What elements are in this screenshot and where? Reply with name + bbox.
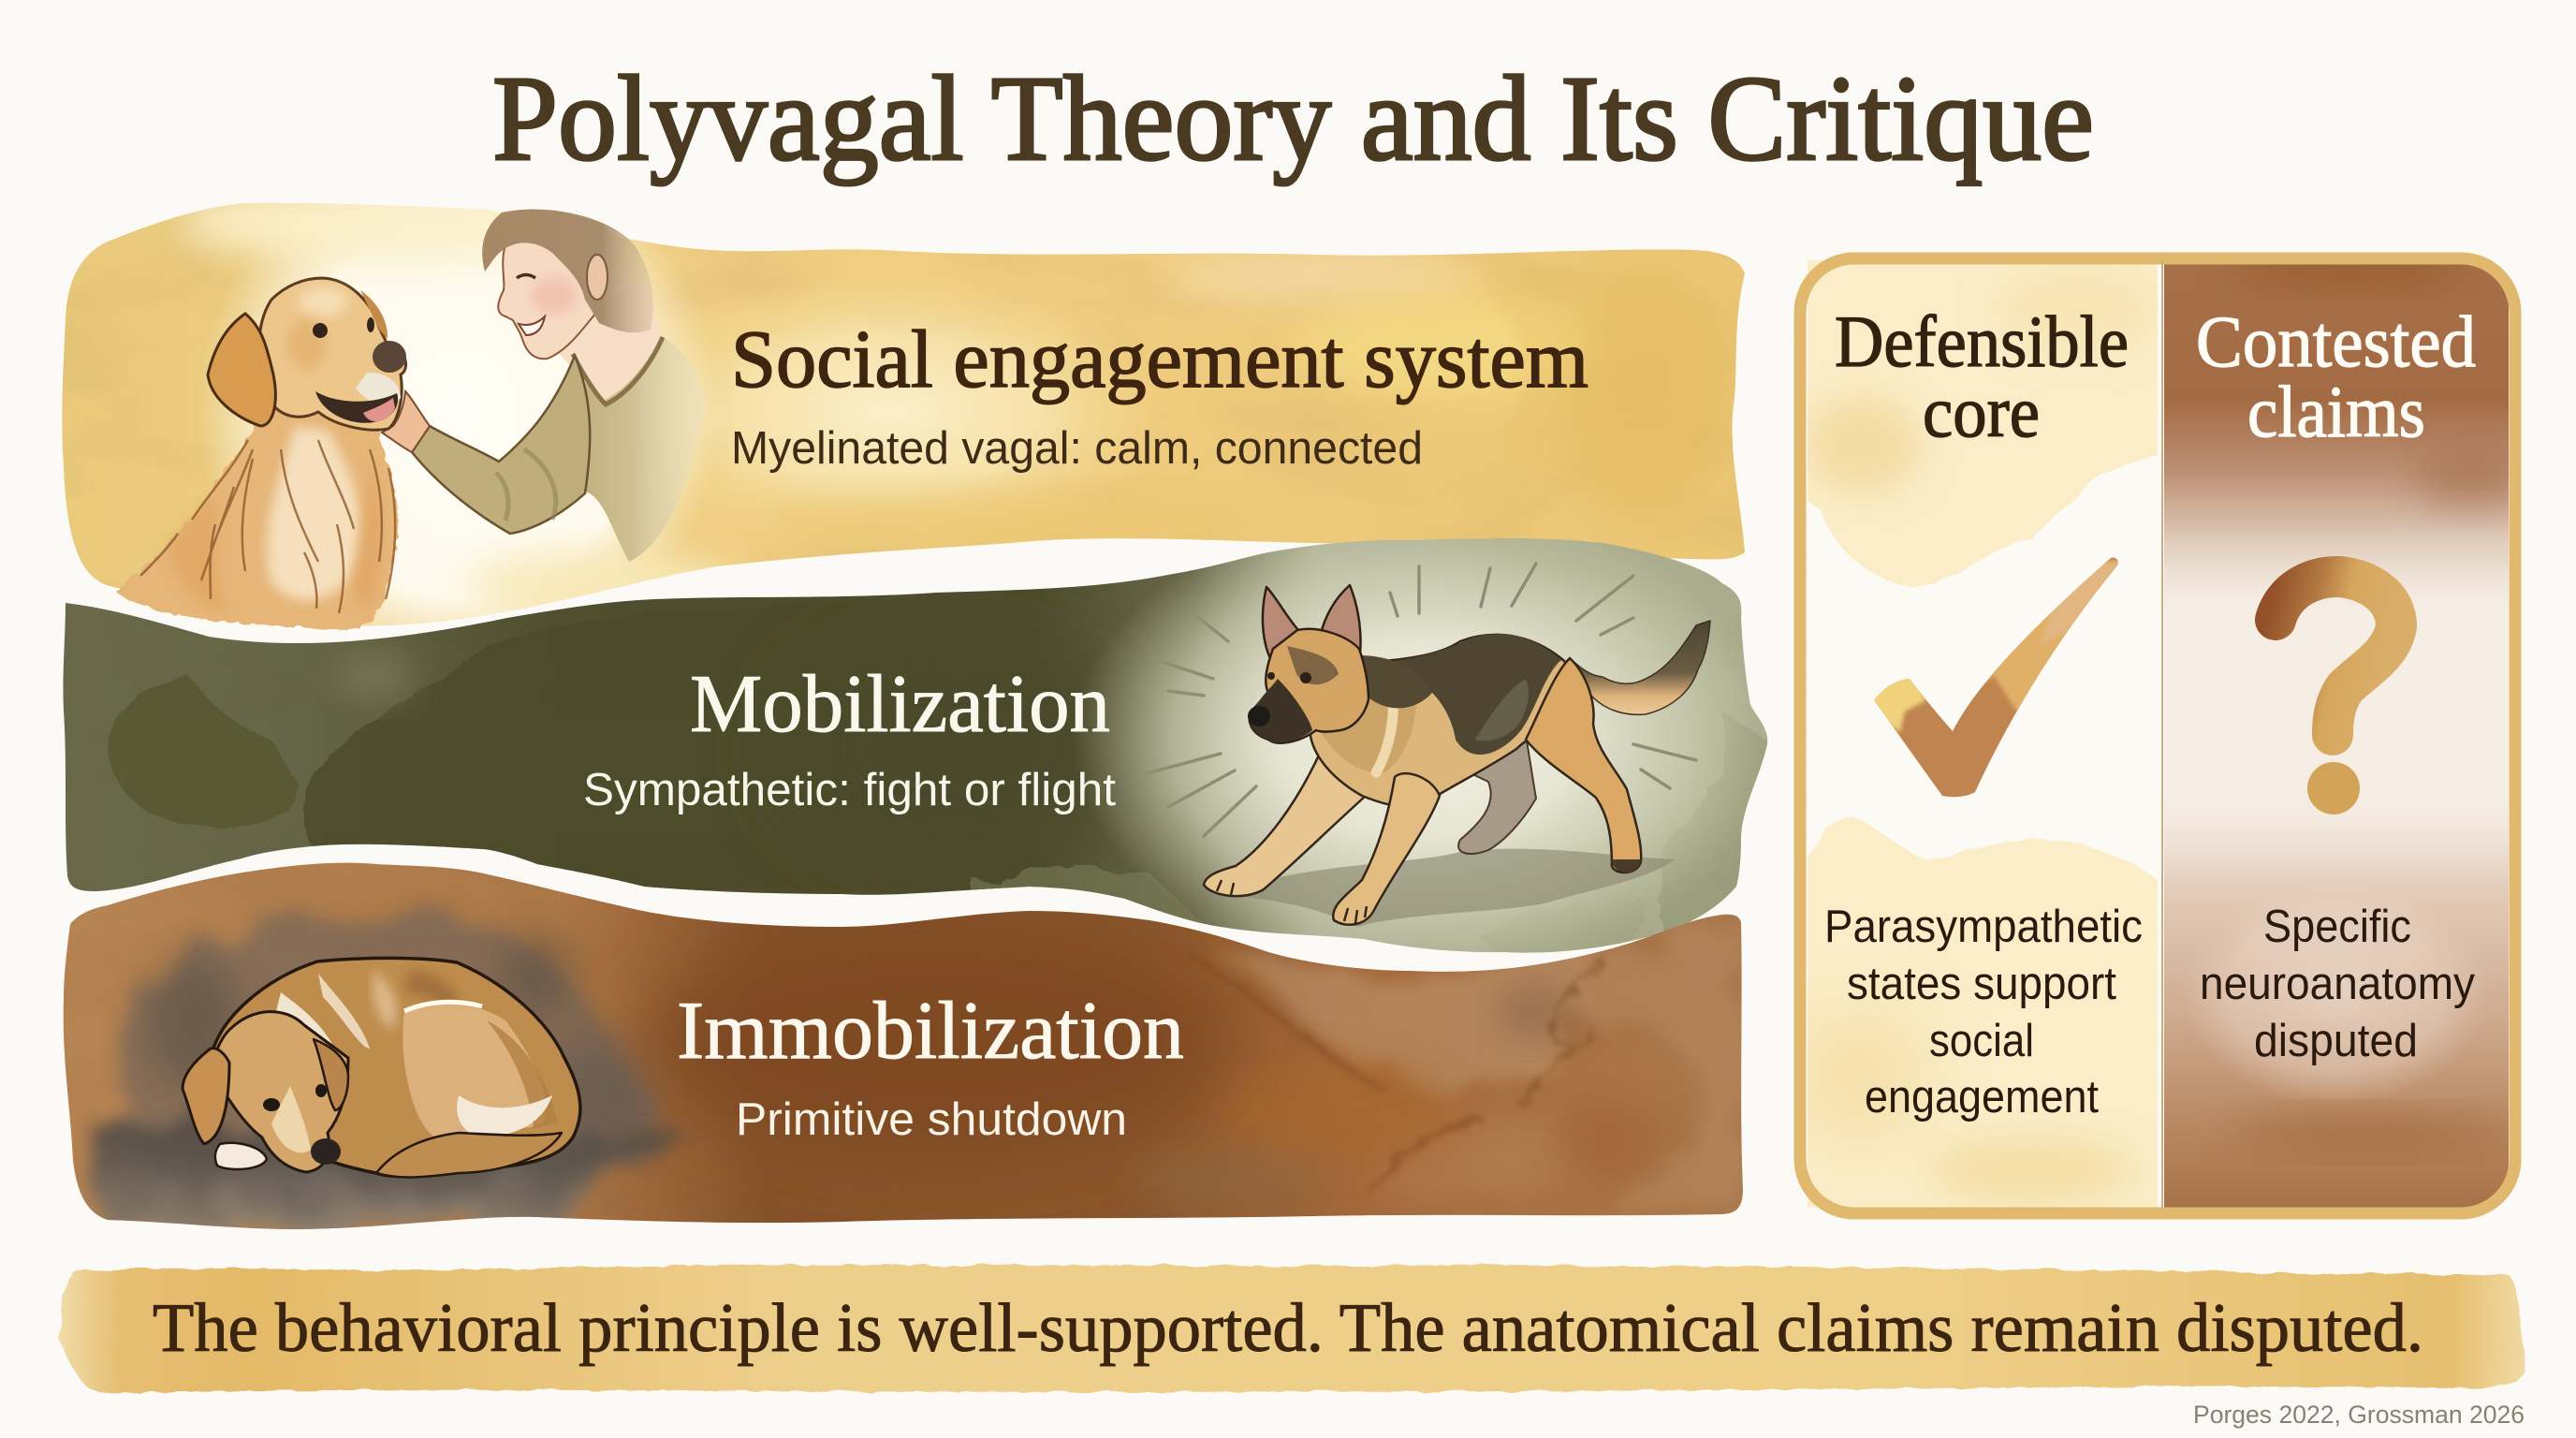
retriever head [259, 278, 406, 430]
heading: defensible core [1835, 301, 2129, 452]
head [1250, 629, 1368, 743]
citation: Porges 2022, Grossman 2026 [2193, 1401, 2525, 1429]
heading: defensible core: core [1923, 371, 2040, 452]
dark lobe at the left [108, 674, 300, 828]
heading: defensible core: Defensible [1835, 301, 2129, 382]
illustration: person petting dog [116, 209, 705, 629]
tail [376, 1133, 562, 1178]
panel: defensible core vs contested claims [1793, 248, 2527, 1217]
text: specific neuroanatomy: disputed [2254, 1016, 2418, 1066]
column background: contested claims [2164, 248, 2527, 1208]
neck ruff [1320, 668, 1416, 773]
person face [498, 220, 599, 359]
muzzle [1250, 679, 1312, 742]
text: parasympathetic states: engagement [1865, 1072, 2099, 1123]
haunch [402, 1003, 546, 1137]
person arm [412, 356, 590, 534]
panel: immobilization [64, 863, 1743, 1229]
pale washes on the right [1208, 946, 1610, 1094]
panel: social engagement system [62, 202, 1745, 631]
golden retriever body [116, 403, 397, 629]
band background: olive wash [63, 538, 1767, 953]
retriever mouth [315, 391, 398, 423]
subtitle: sympathetic: Sympathetic: fight or flight [583, 765, 1116, 815]
text: parasympathetic states: social [1929, 1016, 2034, 1066]
band background: yellow wash [62, 202, 1745, 626]
heading: contested claims: claims [2247, 371, 2425, 452]
person torso [573, 337, 705, 562]
far hind leg [1458, 735, 1536, 854]
heading: immobilization: Immobilization [677, 986, 1184, 1077]
title: Polyvagal Theory and Its Critique [492, 51, 2094, 186]
banner text: The behavioral principle is well-supported. The anatomical claims remain disputed. [153, 1290, 2423, 1367]
icon: question mark [2276, 577, 2396, 814]
panel frame and divider [1800, 258, 2515, 1213]
banner brush stroke [58, 1265, 2525, 1393]
text: specific neuroanatomy [2200, 902, 2475, 1066]
near front leg [1333, 773, 1440, 925]
text: specific neuroanatomy: Specific [2263, 902, 2411, 952]
saddle marking [1376, 634, 1561, 755]
paw [215, 1143, 267, 1169]
shadow blot around dog [124, 912, 650, 1203]
heading: social engagement system: Social engagement system [731, 315, 1588, 405]
text: parasympathetic states [1824, 902, 2143, 1123]
far front leg [1204, 749, 1376, 896]
retriever muzzle [356, 373, 401, 406]
ears [1263, 587, 1299, 660]
ears [183, 1049, 229, 1144]
retriever nose and eyes [373, 341, 406, 373]
head [211, 1012, 348, 1172]
illustration: curled-up sleeping dog [183, 958, 580, 1178]
heading: contested claims [2196, 301, 2476, 452]
ground shadow [1217, 849, 1675, 927]
dark bleed lines [1263, 957, 1606, 1188]
rays around the dog [1144, 564, 1696, 836]
conclusion banner [58, 1265, 2525, 1393]
heading: mobilization: Mobilization [690, 659, 1110, 750]
heading: contested claims: Contested [2196, 301, 2476, 382]
dark wash behind text [303, 634, 1016, 891]
panel: mobilization [63, 538, 1767, 953]
icon: check mark [1863, 552, 2125, 805]
illustration: alert german shepherd [1204, 585, 1710, 927]
body [211, 958, 580, 1176]
tail [1570, 621, 1710, 714]
text: specific neuroanatomy: neuroanatomy [2200, 959, 2475, 1009]
nose and eyes [311, 1138, 341, 1165]
column background: defensible core [1793, 253, 2162, 1217]
near hind leg [1526, 658, 1641, 873]
person neck [552, 281, 661, 401]
nose and eye [1248, 706, 1270, 726]
person hair [482, 209, 653, 332]
torso [1310, 635, 1589, 807]
subtitle: primitive shutdown: Primitive shutdown [736, 1094, 1127, 1145]
retriever fur strokes [140, 440, 395, 613]
text: parasympathetic states: Parasympathetic [1824, 902, 2143, 952]
text: parasympathetic states: states support [1847, 959, 2116, 1009]
subtitle: myelinated vagal: Myelinated vagal: calm, connected [731, 423, 1423, 474]
band background: brown wash [64, 863, 1743, 1229]
person hand [382, 391, 430, 452]
retriever ears [208, 314, 275, 426]
